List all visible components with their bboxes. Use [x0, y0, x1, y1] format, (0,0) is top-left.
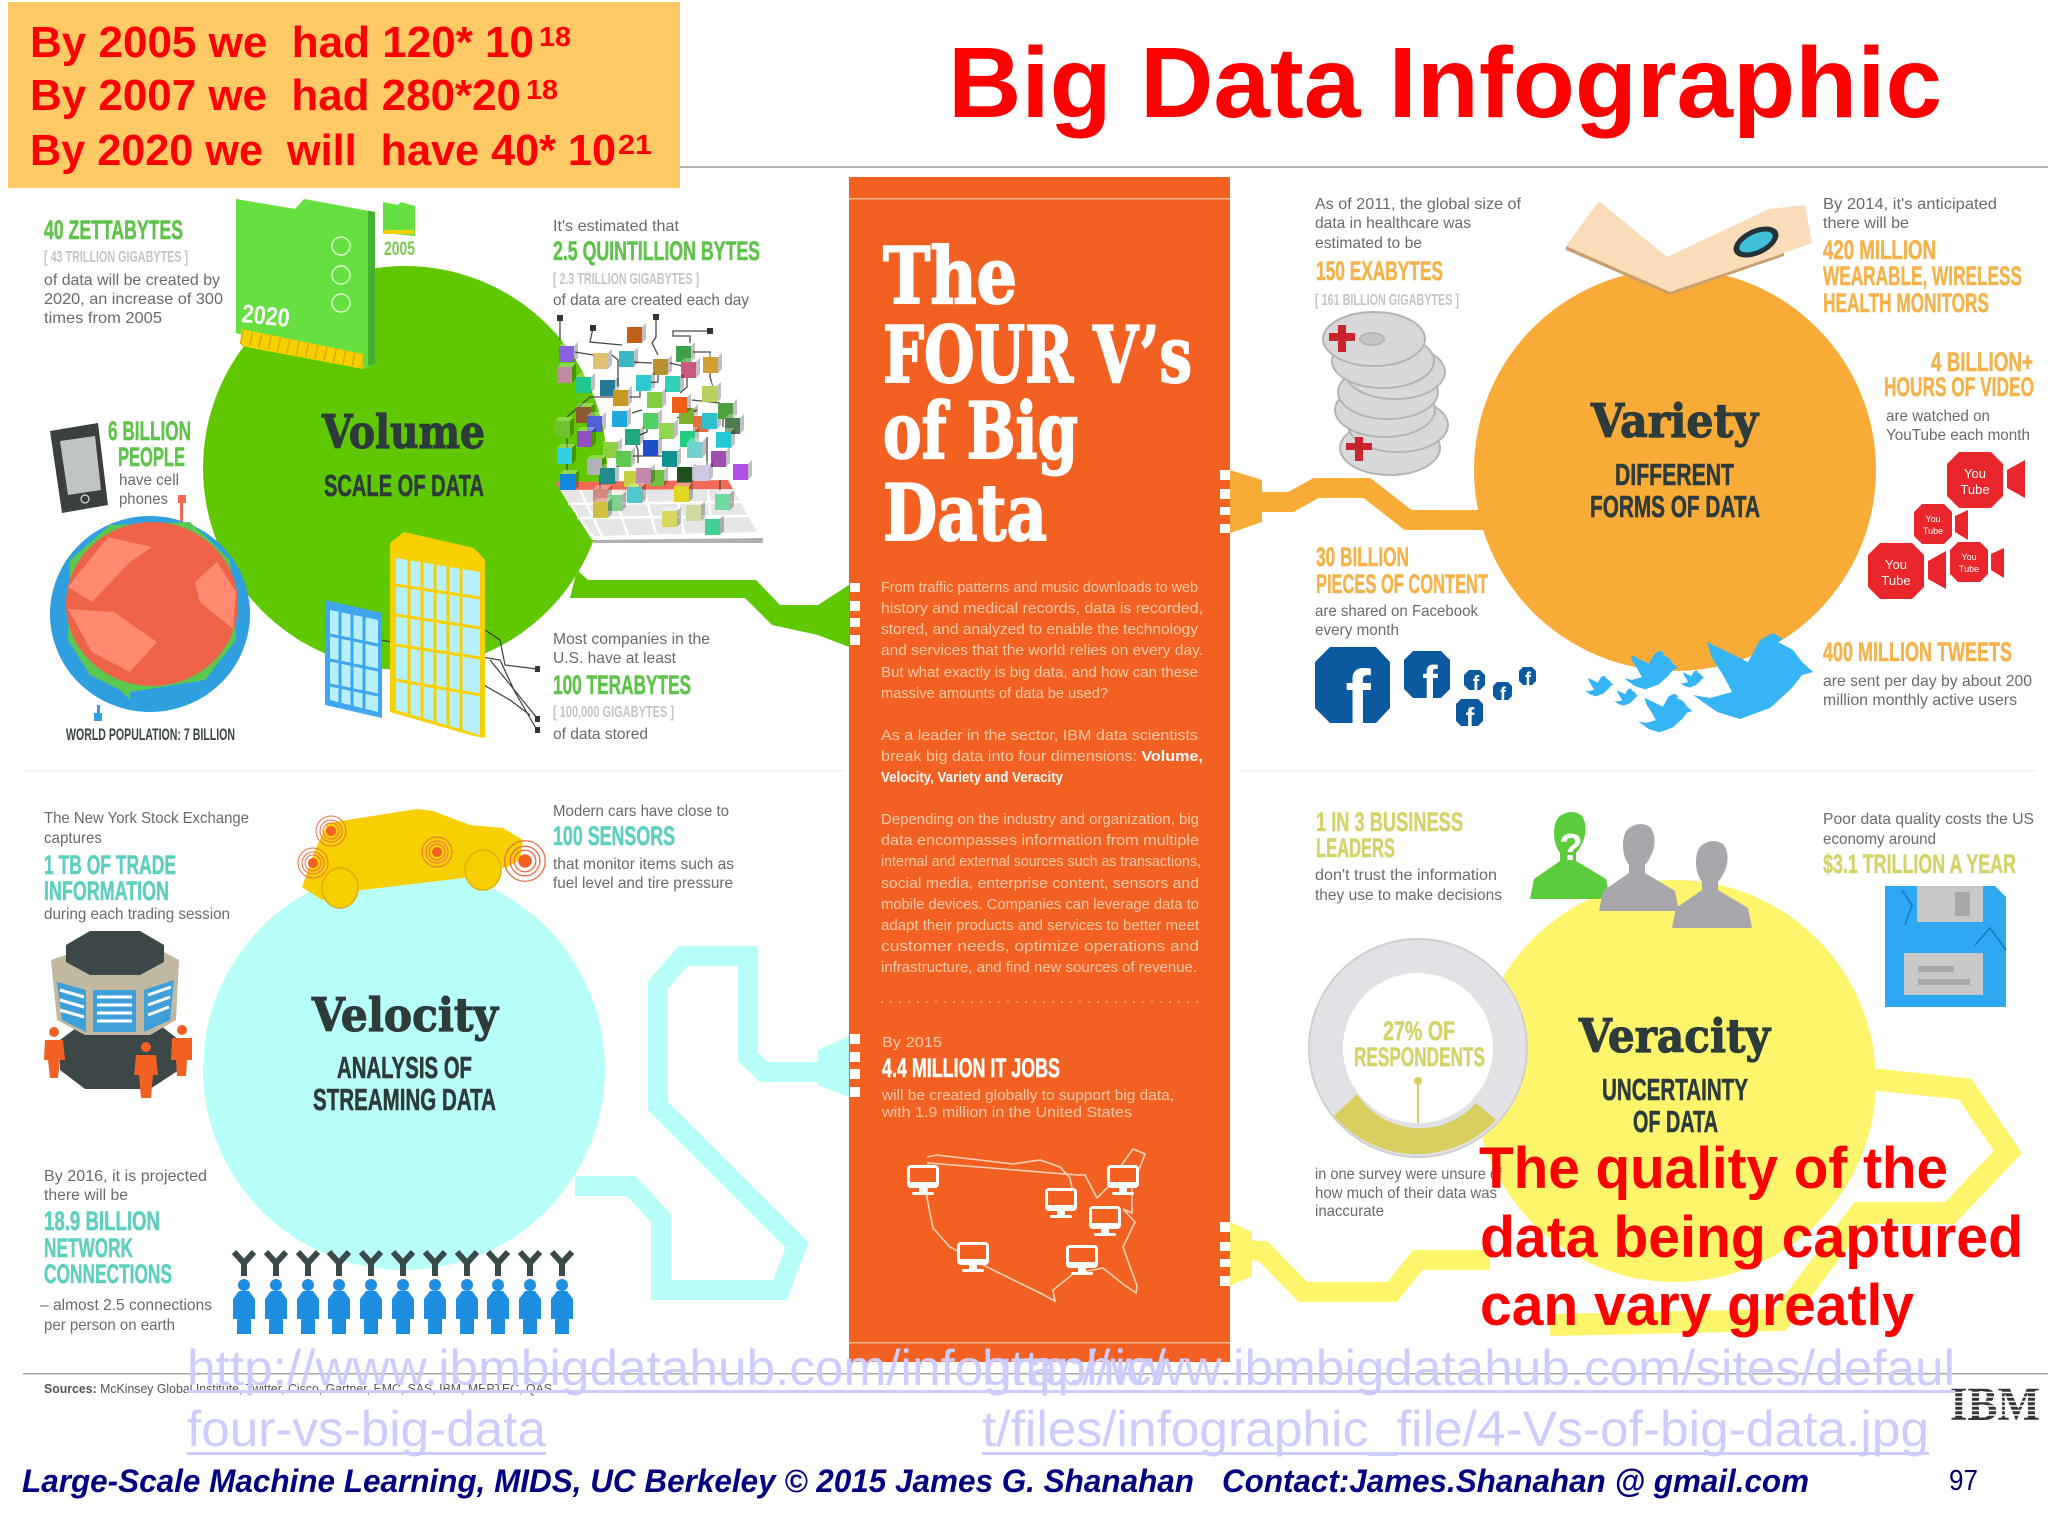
connector: veracity [1230, 1078, 2008, 1325]
text: 100 terabytes: 100 TERABYTES [553, 670, 691, 700]
text: business leaders: don't trust the information [1315, 867, 1497, 884]
text: healthcare exabytes: [ 161 BILLION GIGABYTES ] [1315, 292, 1459, 309]
veracity circle [1474, 880, 1876, 1282]
text: 6 billion people: phones [119, 491, 168, 508]
panel heading: Data [883, 468, 1047, 559]
icon: facebook badges: f [1500, 684, 1507, 704]
industry paragraph: data encompasses information from multiple [881, 832, 1199, 849]
text: 40 zettabytes: 2020, an increase of 300 [44, 291, 223, 308]
text: 2.5 quintillion bytes: 2.5 QUINTILLION BYTES [553, 236, 760, 266]
text: stock exchange: during each trading session [44, 906, 230, 923]
industry paragraph: internal and external sources such as transactions, [881, 853, 1201, 870]
text: 40 zettabytes: of data will be created by [44, 272, 220, 289]
text: 100 sensors: 100 SENSORS [553, 821, 675, 851]
text: tweets: are sent per day by about 200 [1823, 673, 2032, 690]
text: 100 sensors: that monitor items such as [553, 856, 734, 873]
icon: buildings [325, 532, 540, 738]
text: 40 zettabytes: times from 2005 [44, 310, 162, 327]
panel: veracity [1309, 807, 2034, 1282]
text: facebook content: PIECES OF CONTENT [1316, 569, 1488, 599]
callout: data growth box: By 2005 we had 120* 10 [30, 18, 534, 67]
callout: data quality note: can vary greatly [1480, 1273, 1914, 1338]
icon: memory cards: 2005 [384, 239, 415, 260]
text: 2.5 quintillion bytes: It's estimated that [553, 218, 680, 235]
text: facebook content: every month [1315, 622, 1399, 639]
industry paragraph: social media, enterprise content, sensors and [881, 875, 1199, 892]
icon: facebook badges [1315, 647, 1536, 740]
icon: youtube cameras [1868, 452, 2025, 599]
logo: IBM: IBM [1950, 1378, 2040, 1431]
chart: 27 percent donut: 27% OF [1383, 1016, 1455, 1046]
text: network connections: – almost 2.5 connections [40, 1297, 212, 1314]
title: Big Data Infographic [948, 27, 1942, 139]
IT jobs stat: with 1.9 million in the United States [881, 1104, 1132, 1121]
text: 2.5 quintillion bytes [553, 218, 760, 309]
icon: twitter birds [1585, 633, 1813, 732]
text: youtube hours: are watched on [1886, 408, 1990, 425]
text: stock exchange: INFORMATION [44, 876, 169, 906]
text: network connections [40, 1168, 212, 1334]
text: healthcare exabytes: estimated to be [1315, 235, 1422, 252]
intro paragraph: and services that the world relies on every day. [881, 642, 1203, 659]
veracity subtitle [1602, 1072, 1748, 1139]
text: tweets [1823, 637, 2032, 709]
icon: youtube cameras: You [1961, 552, 1977, 562]
text: network connections: 18.9 BILLION [44, 1206, 160, 1236]
leader paragraph: break big data into four dimensions: Volume, [881, 748, 1203, 765]
text: survey note: inaccurate [1315, 1203, 1384, 1220]
text: youtube hours [1884, 347, 2034, 444]
panel heading: FOUR V’s [883, 310, 1192, 401]
text: facebook content: 30 BILLION [1316, 542, 1409, 572]
text: 2.5 quintillion bytes: [ 2.3 TRILLION GIGABYTES ] [553, 271, 699, 288]
text: 100 terabytes: [ 100,000 GIGABYTES ] [553, 704, 674, 721]
text: facebook content: are shared on Facebook [1315, 603, 1479, 620]
velocity subtitle [313, 1050, 496, 1117]
intro paragraph: massive amounts of data be used? [881, 685, 1108, 702]
icon: memory cards [236, 199, 415, 369]
text: wearable monitors: there will be [1823, 215, 1909, 232]
leader paragraph: Velocity, Variety and Veracity [881, 769, 1064, 786]
text: data quality cost: Poor data quality costs the US [1823, 811, 2034, 828]
text: survey note: in one survey were unsure of [1315, 1166, 1502, 1183]
footer credit: Large-Scale Machine Learning, MIDS, UC Berkeley © 2015 James G. Shanahan [22, 1463, 1194, 1499]
icon: facebook badges: f [1466, 702, 1475, 732]
text: business leaders: LEADERS [1316, 833, 1395, 863]
text: 40 zettabytes: [ 43 TRILLION GIGABYTES ] [44, 249, 188, 266]
panel: volume [44, 199, 763, 744]
intro paragraph: From traffic patterns and music downloads to web [881, 579, 1198, 596]
text: data quality cost [1823, 811, 2034, 879]
text: 100 terabytes: Most companies in the [553, 631, 710, 648]
icon: phone [50, 423, 108, 513]
text: wearable monitors: By 2014, it's anticipated [1823, 196, 1997, 213]
text: network connections: CONNECTIONS [44, 1259, 172, 1289]
intro paragraph [881, 579, 1203, 702]
icon: data cubes on keyboard [555, 314, 763, 543]
text: 100 terabytes: U.S. have at least [553, 650, 677, 667]
icon: connected people row [233, 1252, 573, 1334]
text: network connections: per person on earth [44, 1317, 175, 1334]
text: 40 zettabytes [44, 215, 223, 327]
text: healthcare exabytes: data in healthcare was [1315, 215, 1471, 232]
variety subtitle: DIFFERENT [1615, 457, 1734, 492]
icon: youtube cameras: Tube [1923, 526, 1943, 536]
text: network connections: there will be [44, 1187, 128, 1204]
velocity circle [203, 868, 605, 1270]
IT jobs stat: By 2015 [882, 1034, 942, 1051]
connector: velocity [575, 956, 849, 1290]
icon: facebook badges: f [1345, 655, 1371, 740]
callout: data growth box: 18 [526, 74, 558, 105]
callout: data quality note: data being captured [1480, 1205, 2023, 1270]
panel heading [883, 231, 1192, 559]
panel: velocity [40, 803, 734, 1334]
header rule [680, 166, 2048, 168]
velocity subtitle: ANALYSIS OF [337, 1050, 472, 1085]
industry paragraph [881, 811, 1201, 976]
text: youtube hours: YouTube each month [1886, 427, 2030, 444]
volume circle [203, 266, 607, 670]
label: world population: WORLD POPULATION: 7 BILLION [66, 725, 235, 744]
intro paragraph: But what exactly is big data, and how can these [881, 664, 1198, 681]
IT jobs stat [881, 1034, 1174, 1121]
icon: youtube cameras: You [1885, 557, 1907, 572]
text: healthcare exabytes [1315, 196, 1522, 309]
connector notches [850, 470, 1230, 1286]
veracity subtitle: OF DATA [1633, 1104, 1718, 1139]
icon: floppy disk [1885, 886, 2006, 1007]
leader paragraph: As a leader in the sector, IBM data scientists [881, 727, 1198, 744]
footer credit: Contact:James.Shanahan @ gmail.com [1222, 1463, 1809, 1499]
IT jobs stat: will be created globally to support big data, [881, 1087, 1174, 1104]
link: left source: http://www.ibmbigdatahub.com/infographic/ [187, 1340, 1166, 1396]
callout: data quality note: The quality of the [1479, 1136, 1948, 1201]
text: 100 terabytes [553, 631, 710, 743]
text: sources: Sources: McKinsey Global Institute, Twitter, Cisco, Gartner, EMC, SAS, IBM, MEPTEC, QAS [44, 1381, 552, 1396]
variety heading: Variety [1590, 394, 1759, 448]
panel: variety [1315, 196, 2034, 740]
icon: US map with computers [907, 1149, 1145, 1301]
text: business leaders [1315, 807, 1502, 904]
icon: youtube cameras: Tube [1960, 482, 1990, 497]
icon: people busts: ? [1559, 827, 1583, 869]
industry paragraph: Depending on the industry and organization, big [881, 811, 1199, 828]
text: network connections: By 2016, it is projected [44, 1168, 207, 1185]
variety circle [1474, 269, 1876, 671]
link: left source: four-vs-big-data [187, 1401, 546, 1457]
text: survey note: how much of their data was [1315, 1185, 1497, 1202]
callout: data quality note [1479, 1136, 2023, 1338]
icon: facebook badges: f [1422, 656, 1438, 708]
icon: disc stack [1323, 312, 1448, 475]
icon: facebook badges: f [1525, 669, 1532, 689]
text: 6 billion people: have cell [119, 472, 179, 489]
icon: car with sensors [298, 809, 545, 908]
text: tweets: million monthly active users [1823, 692, 2017, 709]
callout: data growth box: 21 [618, 129, 652, 160]
connector: variety [1230, 470, 1490, 533]
text: 6 billion people: PEOPLE [118, 442, 185, 472]
IT jobs stat: 4.4 MILLION IT JOBS [882, 1053, 1060, 1083]
text: 6 billion people: 6 BILLION [108, 416, 191, 446]
veracity subtitle: UNCERTAINTY [1602, 1072, 1748, 1107]
icon: arm with wearable [1566, 201, 1812, 295]
text: healthcare exabytes: 150 EXABYTES [1316, 256, 1443, 286]
industry paragraph: customer needs, optimize operations and [881, 938, 1199, 955]
link: right source: http://www.ibmbigdatahub.com/sites/defaul [982, 1340, 1955, 1396]
panel heading: The [883, 231, 1017, 322]
icon: people busts [1530, 812, 1752, 928]
veracity heading: Veracity [1578, 1009, 1771, 1063]
link: left source [187, 1340, 1166, 1457]
volume subtitle: SCALE OF DATA [324, 468, 484, 503]
icon: youtube cameras: You [1964, 466, 1986, 481]
footer rule [23, 1373, 2048, 1374]
link: right source [982, 1340, 1955, 1457]
text: business leaders: 1 IN 3 BUSINESS [1316, 807, 1463, 837]
text: 40 zettabytes: 40 ZETTABYTES [44, 215, 183, 245]
footer credit [22, 1463, 1809, 1499]
chart: 27 percent donut: RESPONDENTS [1354, 1042, 1485, 1072]
leader paragraph [881, 727, 1203, 786]
intro paragraph: stored, and analyzed to enable the technology [881, 621, 1199, 638]
connector: volume [570, 570, 849, 647]
text: facebook content [1315, 542, 1488, 639]
text: 2.5 quintillion bytes: of data are created each day [553, 292, 749, 309]
text: wearable monitors [1823, 196, 2022, 318]
variety subtitle: FORMS OF DATA [1590, 489, 1760, 524]
velocity heading: Velocity [311, 988, 499, 1042]
intro paragraph: history and medical records, data is recorded, [881, 600, 1203, 617]
chart: 27 percent donut [1309, 939, 1527, 1157]
callout: data growth box: By 2020 we will have 40* 10 [30, 126, 616, 175]
text: 6 billion people [108, 416, 191, 508]
text: 100 sensors [553, 803, 734, 892]
text: data quality cost: economy around [1823, 831, 1936, 848]
icon: youtube cameras: Tube [1959, 564, 1979, 574]
icon: globe [50, 495, 250, 721]
text: 100 terabytes: of data stored [553, 726, 648, 743]
industry paragraph: infrastructure, and find new sources of revenue. [881, 959, 1197, 976]
text: wearable monitors: 420 MILLION [1823, 235, 1936, 265]
velocity subtitle: STREAMING DATA [313, 1082, 496, 1117]
text: survey note [1315, 1166, 1502, 1220]
text: network connections: NETWORK [44, 1233, 133, 1263]
callout: data growth box: By 2007 we had 280*20 [30, 71, 521, 120]
icon: facebook badges: f [1473, 673, 1480, 695]
industry paragraph: mobile devices. Companies can leverage data to [881, 896, 1199, 913]
text: stock exchange: The New York Stock Exchange [44, 810, 249, 827]
panel heading: of Big [883, 386, 1078, 477]
text: healthcare exabytes: As of 2011, the global size of [1315, 196, 1522, 213]
callout: data growth box [8, 2, 680, 188]
icon: youtube cameras: Tube [1881, 573, 1911, 588]
icon: trading floor server [44, 931, 192, 1098]
link: right source: t/files/infographic_file/4-Vs-of-big-data.jpg [982, 1401, 1929, 1457]
text: 100 sensors: fuel level and tire pressure [553, 875, 733, 892]
industry paragraph: adapt their products and services to better meet [881, 917, 1200, 934]
text: 100 sensors: Modern cars have close to [553, 803, 729, 820]
panel: four Vs centre column [849, 177, 1230, 1362]
callout: data growth box: 18 [539, 21, 571, 52]
volume heading: Volume [321, 405, 485, 459]
variety subtitle [1590, 457, 1760, 524]
text: stock exchange: captures [44, 830, 102, 847]
page number: 97 [1949, 1465, 1978, 1497]
text: stock exchange [44, 810, 249, 923]
text: stock exchange: 1 TB OF TRADE [44, 850, 176, 880]
icon: youtube cameras: You [1925, 514, 1941, 524]
icon: memory cards: 2020 [240, 298, 291, 333]
text: business leaders: they use to make decisions [1315, 887, 1502, 904]
